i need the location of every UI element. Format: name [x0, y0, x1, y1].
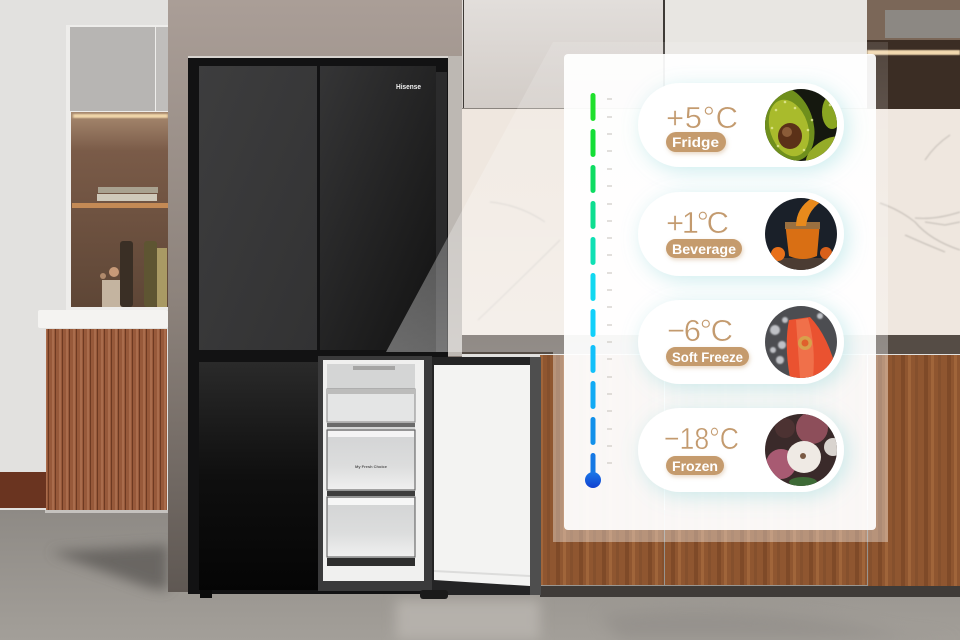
brand logo: Hisense [396, 82, 421, 91]
left counter [38, 310, 168, 328]
upper left door [199, 66, 317, 350]
label: Beverage: Beverage [672, 241, 736, 257]
refrigerator [188, 56, 541, 599]
counter top [462, 335, 960, 354]
thermometer bulb [585, 472, 601, 488]
marble backsplash [462, 109, 960, 337]
icon: ice cream [765, 414, 837, 486]
left baseboard [0, 472, 46, 508]
label: Fridge: Fridge [672, 134, 719, 150]
temperature panel [564, 54, 876, 530]
label: Beverage [666, 239, 742, 258]
temperature: +5°C: +5°C [666, 100, 738, 135]
icon: orange juice [765, 198, 837, 270]
floor [0, 510, 960, 640]
open freezer compartment [318, 356, 432, 591]
lower left door [199, 362, 318, 590]
label: Fridge [666, 132, 726, 152]
icon: salmon on ice [765, 306, 838, 378]
middle drawer: My Fresh Choice [355, 464, 388, 469]
fridge body [188, 58, 448, 594]
light beam from freezer to panel [386, 42, 888, 542]
card: frozen [638, 408, 844, 492]
scale ticks [607, 99, 612, 463]
bottom drawer [327, 497, 415, 566]
card: soft freeze [638, 300, 844, 384]
door hinge [420, 590, 448, 599]
middle drawer [327, 430, 415, 490]
label: Soft Freeze: Soft Freeze [672, 349, 743, 365]
label: Frozen: Frozen [672, 458, 718, 474]
icon: avocado [765, 89, 837, 161]
lower wood cabinets [540, 355, 960, 597]
label: Frozen [666, 456, 724, 475]
open freezer door [432, 357, 541, 595]
fridge feet [200, 590, 212, 598]
fridge surround column [168, 0, 462, 592]
thermometer [585, 93, 612, 488]
temperature: -18°C: −18°C [664, 421, 739, 456]
temperature: +1°C: +1°C [666, 205, 729, 240]
upper right cabinets [462, 0, 960, 109]
card: fridge [638, 80, 849, 174]
card: beverage [638, 192, 844, 276]
left wall niche [66, 25, 168, 310]
left fluted wood cabinet [46, 329, 167, 510]
upper right door [320, 66, 436, 350]
temperature: -6°C: −6°C [667, 313, 733, 348]
top drawer [327, 389, 415, 422]
